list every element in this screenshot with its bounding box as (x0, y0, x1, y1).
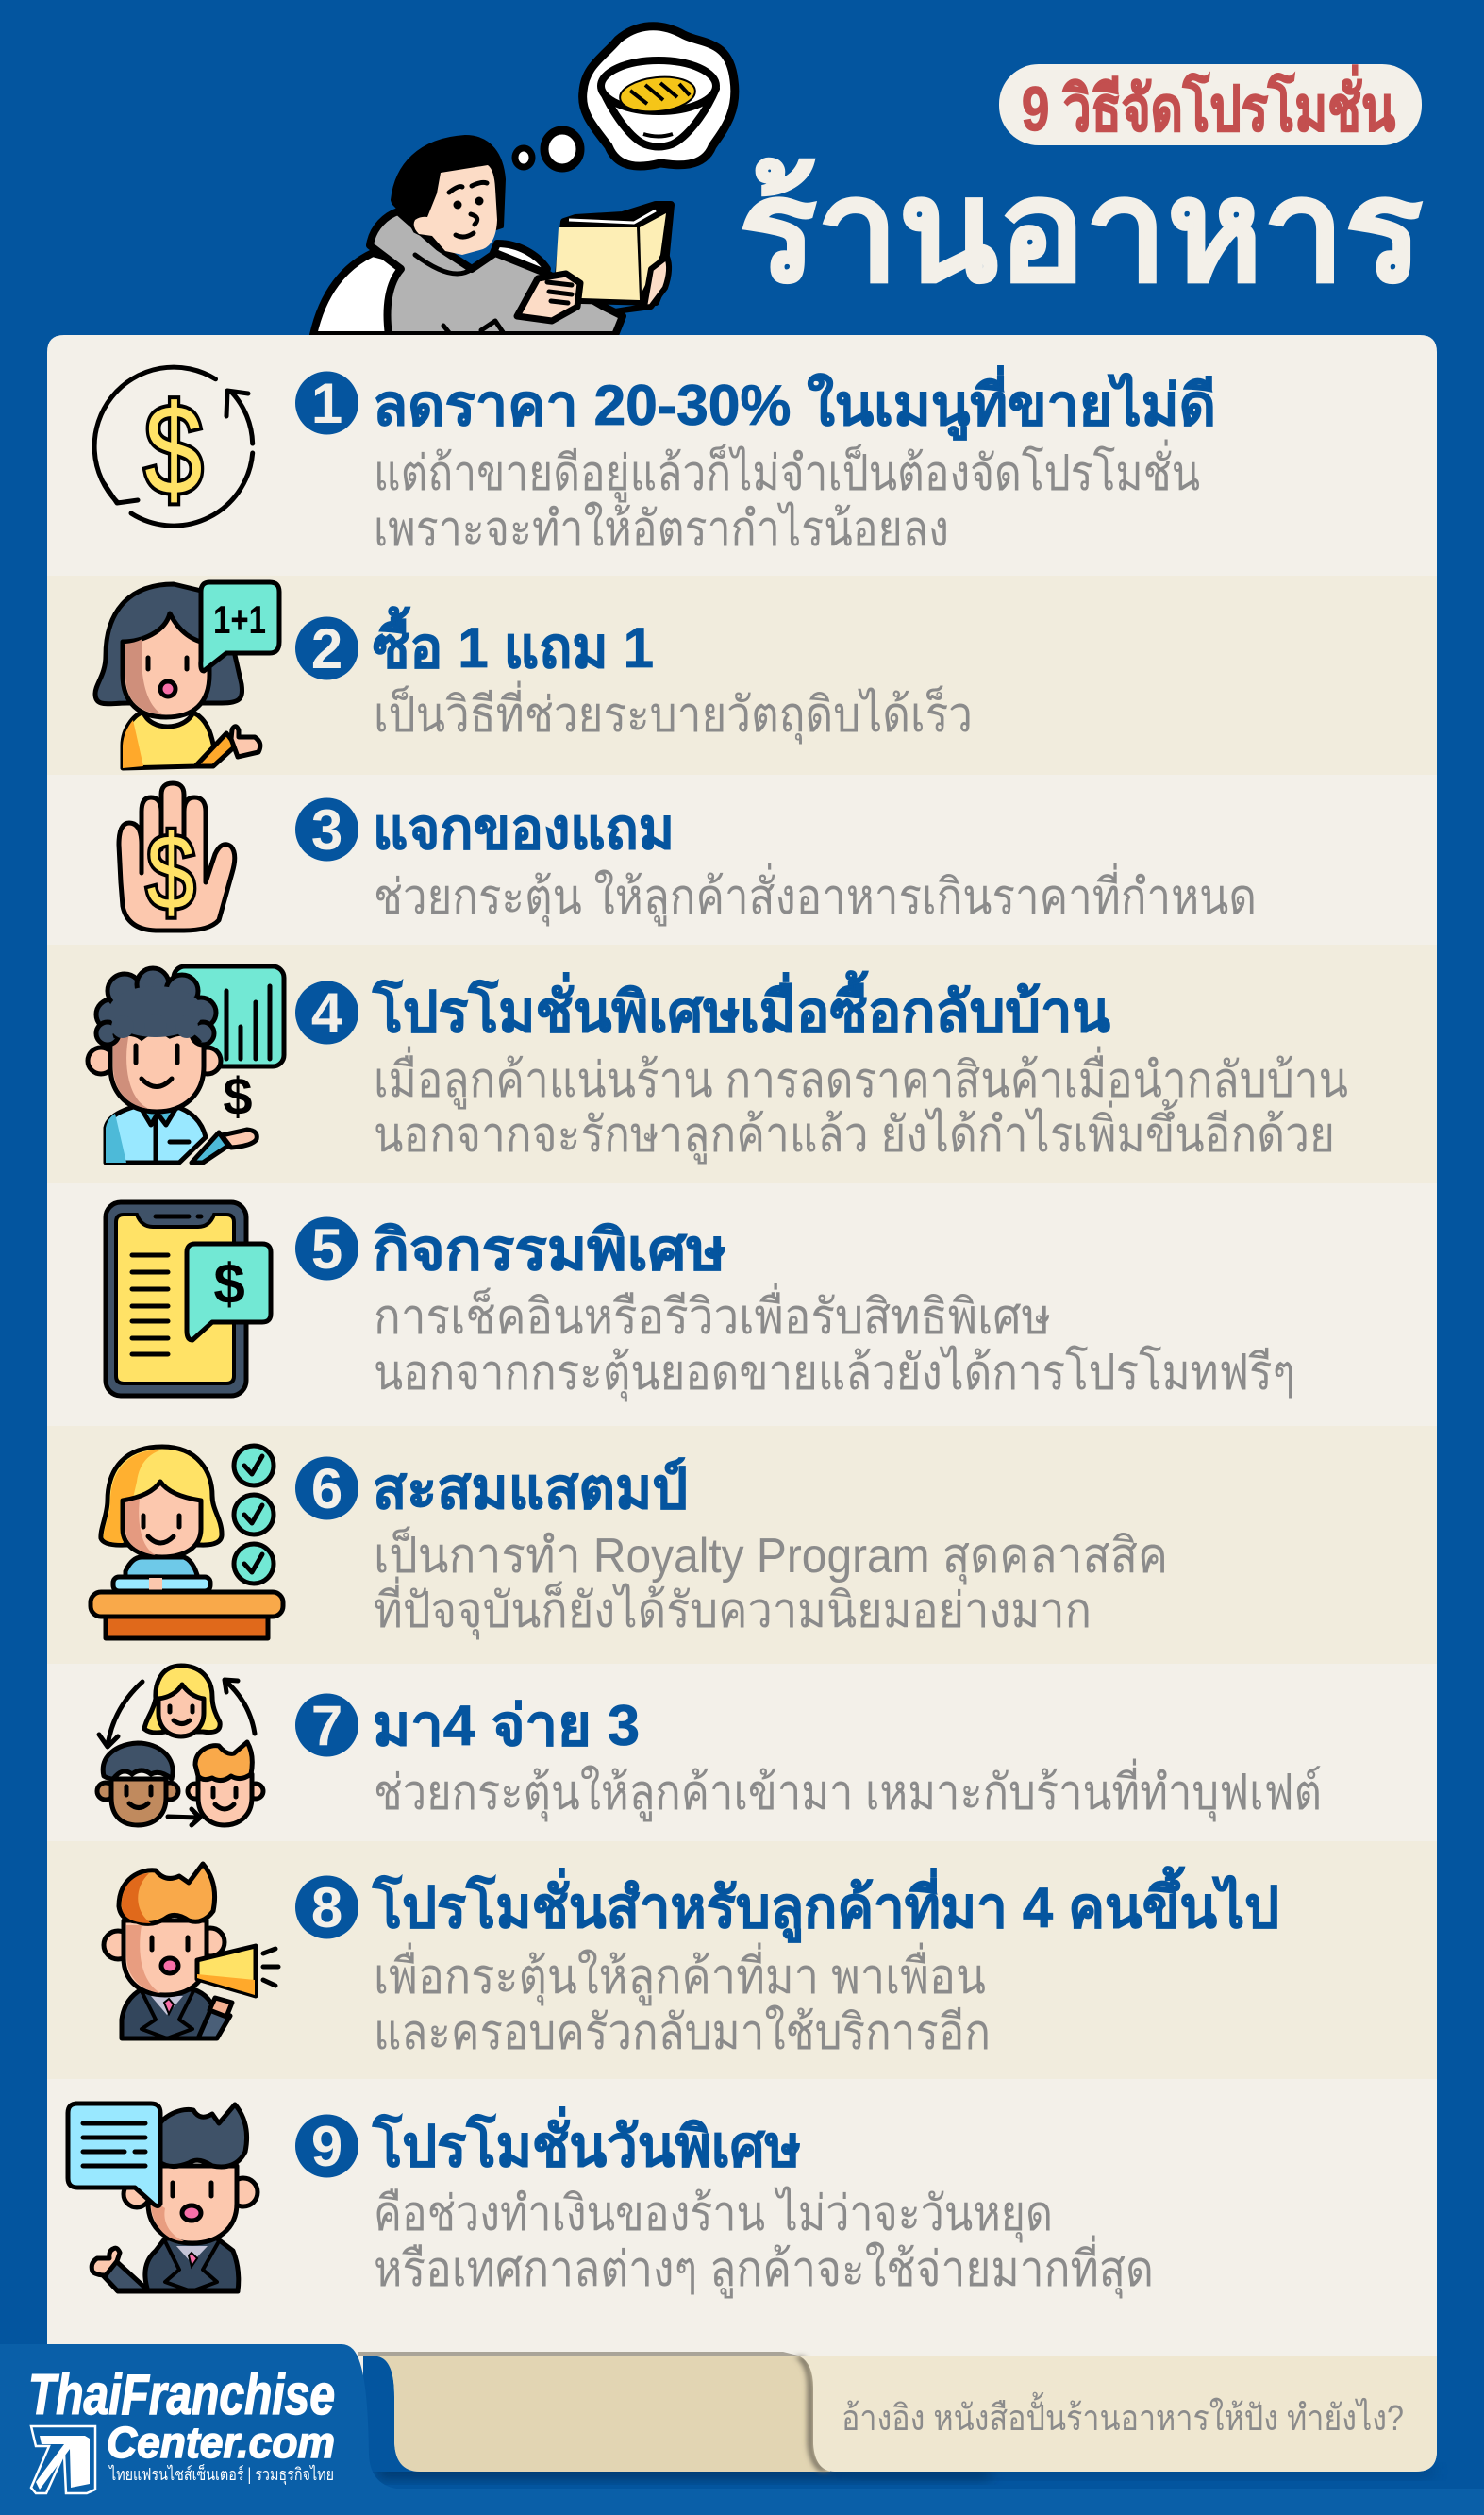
number 4: 4 (311, 981, 343, 1045)
main title: ร้านอาหาร (739, 151, 1423, 311)
badge: 9 ways: 9 วิธีจัดโปรโมชั่น (1022, 64, 1395, 143)
heading 6: สะสมแสตมป์ (373, 1457, 688, 1520)
description 6: ที่ปัจจุบันก็ยังได้รับความนิยมอย่างมาก (374, 1576, 1092, 1640)
number 7 (295, 1693, 358, 1757)
description 9 (374, 2186, 1154, 2299)
row 2 background (47, 576, 1437, 775)
icon: phone with dollar bubble (106, 1202, 271, 1396)
icon: man with chart and dollar: $ (223, 1066, 253, 1126)
number 8: 8 (311, 1876, 342, 1939)
logo block (0, 2344, 396, 2515)
thought bubble with noodle bowl (583, 26, 735, 166)
row 3: free gifts (119, 783, 1257, 931)
icon: woman with 1+1 bubble: 1+1 (213, 597, 266, 642)
heading 4: โปรโมชั่นพิเศษเมื่อซื้อกลับบ้าน (372, 970, 1110, 1044)
number 6: 6 (311, 1457, 342, 1520)
logo tagline: ไทยแฟรนไชส์เซ็นเตอร์ | รวมธุรกิจไทย (108, 2463, 334, 2485)
row 2: buy one get one (47, 576, 1437, 775)
icon: man with megaphone (104, 1864, 278, 2038)
number 3 (295, 798, 358, 862)
icon: woman at desk with checks (91, 1446, 283, 1638)
heading 2: ซื้อ 1 แถม 1 (373, 606, 654, 679)
icon: hand with dollar (119, 783, 235, 931)
heading 9: โปรโมชั่นวันพิเศษ (372, 2106, 801, 2178)
row 5: special activity (106, 1202, 1295, 1402)
heading 3: แจกของแถม (373, 797, 675, 861)
description 9: คือช่วงทำเงินของร้าน ไม่ว่าจะวันหยุด (374, 2186, 1053, 2243)
row 4 background (47, 945, 1437, 1183)
number 2 (295, 617, 358, 680)
icon: cycling dollar (94, 367, 253, 526)
description 4: นอกจากจะรักษาลูกค้าแล้ว ยังได้กำไรเพิ่มขึ้นอีกด้วย (374, 1099, 1335, 1165)
description 5: นอกจากกระตุ้นยอดขายแล้วยังได้การโปรโมทฟรีๆ (374, 1345, 1295, 1402)
icon: man with chart and dollar (88, 966, 284, 1163)
icon: man with speech bubble (68, 2104, 258, 2291)
logo wordmark: ThaiFranchise (28, 2363, 335, 2426)
footer reference tab (794, 2356, 1437, 2472)
number 3: 3 (311, 798, 342, 862)
number 9 (295, 2114, 358, 2178)
number 5: 5 (311, 1217, 342, 1281)
heading 7: มา4 จ่าย 3 (373, 1694, 640, 1757)
description 2: เป็นวิธีที่ช่วยระบายวัตถุดิบได้เร็ว (374, 680, 973, 745)
description 8: เพื่อกระตุ้นให้ลูกค้าที่มา พาเพื่อน (374, 1942, 986, 2006)
icon: three people with arrows (97, 1666, 263, 1825)
description 8 (374, 1942, 991, 2060)
description 9: หรือเทศกาลต่างๆ ลูกค้าจะใช้จ่ายมากที่สุด (374, 2235, 1154, 2299)
description 4 (374, 1046, 1348, 1165)
description 4: เมื่อลูกค้าแน่นร้าน การลดราคาสินค้าเมื่อนำกลับบ้าน (374, 1046, 1348, 1110)
description 5: การเช็คอินหรือรีวิวเพื่อรับสิทธิพิเศษ (374, 1283, 1051, 1345)
description 3: ช่วยกระตุ้น ให้ลูกค้าสั่งอาหารเกินราคาที่กำหนด (374, 863, 1257, 927)
reference text: อ้างอิง หนังสือปั้นร้านอาหารให้ปัง ทำยังไง? (842, 2391, 1404, 2439)
row 9: special days (68, 2104, 1154, 2299)
heading 5: กิจกรรมพิเศษ (373, 1218, 726, 1282)
number 6 (295, 1457, 358, 1520)
number 5 (295, 1217, 358, 1281)
description 1: เพราะจะทำให้อัตรากำไรน้อยลง (374, 501, 949, 557)
thought dots (515, 130, 580, 168)
footer shadows (377, 2465, 1434, 2478)
row 1: discount (94, 365, 1216, 557)
row 4: take-home promotion (47, 945, 1437, 1183)
row 8: groups of four (47, 1841, 1437, 2079)
row 6 background (47, 1426, 1437, 1664)
row 8 background (47, 1841, 1437, 2079)
logo arrow (31, 2426, 95, 2493)
heading 8: โปรโมชั่นสำหรับลูกค้าที่มา 4 คนขึ้นไป (372, 1866, 1279, 1943)
row 7: come 4 pay 3 (97, 1666, 1322, 1825)
header illustration: person reading and thinking of food (313, 26, 735, 335)
icon: phone with dollar bubble: $ (213, 1252, 245, 1316)
logo domain: Center.com (107, 2418, 335, 2467)
description 6 (374, 1527, 1168, 1640)
icon: cycling dollar: $ (144, 379, 203, 522)
description 5 (374, 1283, 1295, 1402)
card panel (47, 335, 1437, 2472)
description 8: และครอบครัวกลับมาใช้บริการอีก (374, 2004, 991, 2060)
number 7: 7 (311, 1694, 342, 1757)
heading 1: ลดราคา 20-30% ในเมนูที่ขายไม่ดี (373, 365, 1216, 441)
description 7: ช่วยกระตุ้นให้ลูกค้าเข้ามา เหมาะกับร้านที่ทำบุฟเฟต์ (374, 1758, 1322, 1822)
footer tab: tan (358, 2352, 830, 2472)
number 1: 1 (311, 372, 342, 435)
row 6: collect stamps (47, 1426, 1437, 1664)
icon: woman with 1+1 bubble (95, 582, 279, 768)
number 4 (295, 981, 358, 1045)
description 1 (374, 439, 1200, 557)
number 1 (295, 372, 358, 435)
icon: hand with dollar: $ (146, 813, 195, 931)
number 9: 9 (311, 2115, 342, 2178)
description 1: แต่ถ้าขายดีอยู่แล้วก็ไม่จำเป็นต้องจัดโปรโมชั่น (374, 439, 1200, 503)
description 6: เป็นการทำ Royalty Program สุดคลาสสิค (374, 1527, 1168, 1585)
number 8 (295, 1876, 358, 1939)
number 2: 2 (311, 617, 342, 680)
person in hoodie (313, 137, 671, 335)
